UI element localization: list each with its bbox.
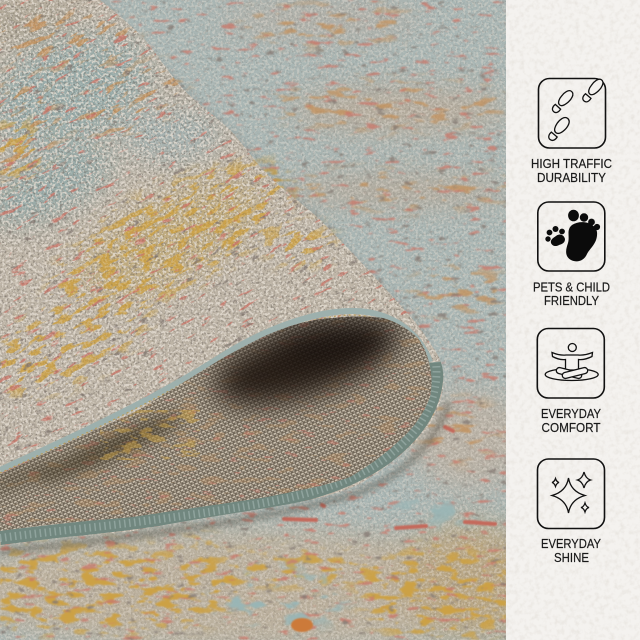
label: high traffic durability: DURABILITY bbox=[537, 171, 607, 185]
rolled rug: woven underside bbox=[0, 316, 432, 531]
panel: feature sidebar bbox=[506, 0, 640, 640]
feature: everyday comfort bbox=[537, 328, 604, 435]
texture: pile speckle on floor bbox=[0, 0, 506, 640]
label: everyday comfort: COMFORT bbox=[542, 421, 601, 435]
label: pets and child friendly: FRIENDLY bbox=[544, 294, 600, 308]
rolled rug: top pile bbox=[0, 0, 450, 550]
label: high traffic durability bbox=[531, 157, 612, 185]
icon: paw and baby foot bbox=[538, 202, 605, 271]
icon: footprints bbox=[538, 77, 606, 148]
label: everyday shine: EVERYDAY bbox=[541, 537, 602, 551]
rolled rug: shadow on floor bbox=[0, 0, 449, 552]
rolled rug: outer hem bbox=[0, 362, 437, 538]
feature: pets and child friendly bbox=[533, 202, 610, 308]
rug surface colour flecks bbox=[0, 0, 506, 640]
label: pets and child friendly bbox=[533, 280, 610, 308]
label: everyday comfort bbox=[541, 407, 602, 435]
label: everyday shine bbox=[541, 537, 602, 565]
feature: high traffic durability bbox=[531, 77, 612, 185]
rolled rug: fold edge binding bbox=[0, 311, 430, 470]
roll colour flecks running along the fold bbox=[199, 249, 201, 251]
feature: everyday shine bbox=[538, 459, 604, 565]
texture: pile speckle on roll bbox=[0, 0, 450, 550]
underside weave visible in shadow bbox=[29, 316, 400, 480]
label: everyday comfort: EVERYDAY bbox=[541, 407, 602, 421]
label: pets and child friendly: PETS & CHILD bbox=[533, 280, 610, 294]
icon: meditating figure bbox=[537, 328, 604, 398]
icon: sparkles bbox=[538, 459, 604, 528]
label: everyday shine: SHINE bbox=[554, 551, 589, 565]
label: high traffic durability: HIGH TRAFFIC bbox=[531, 157, 612, 171]
